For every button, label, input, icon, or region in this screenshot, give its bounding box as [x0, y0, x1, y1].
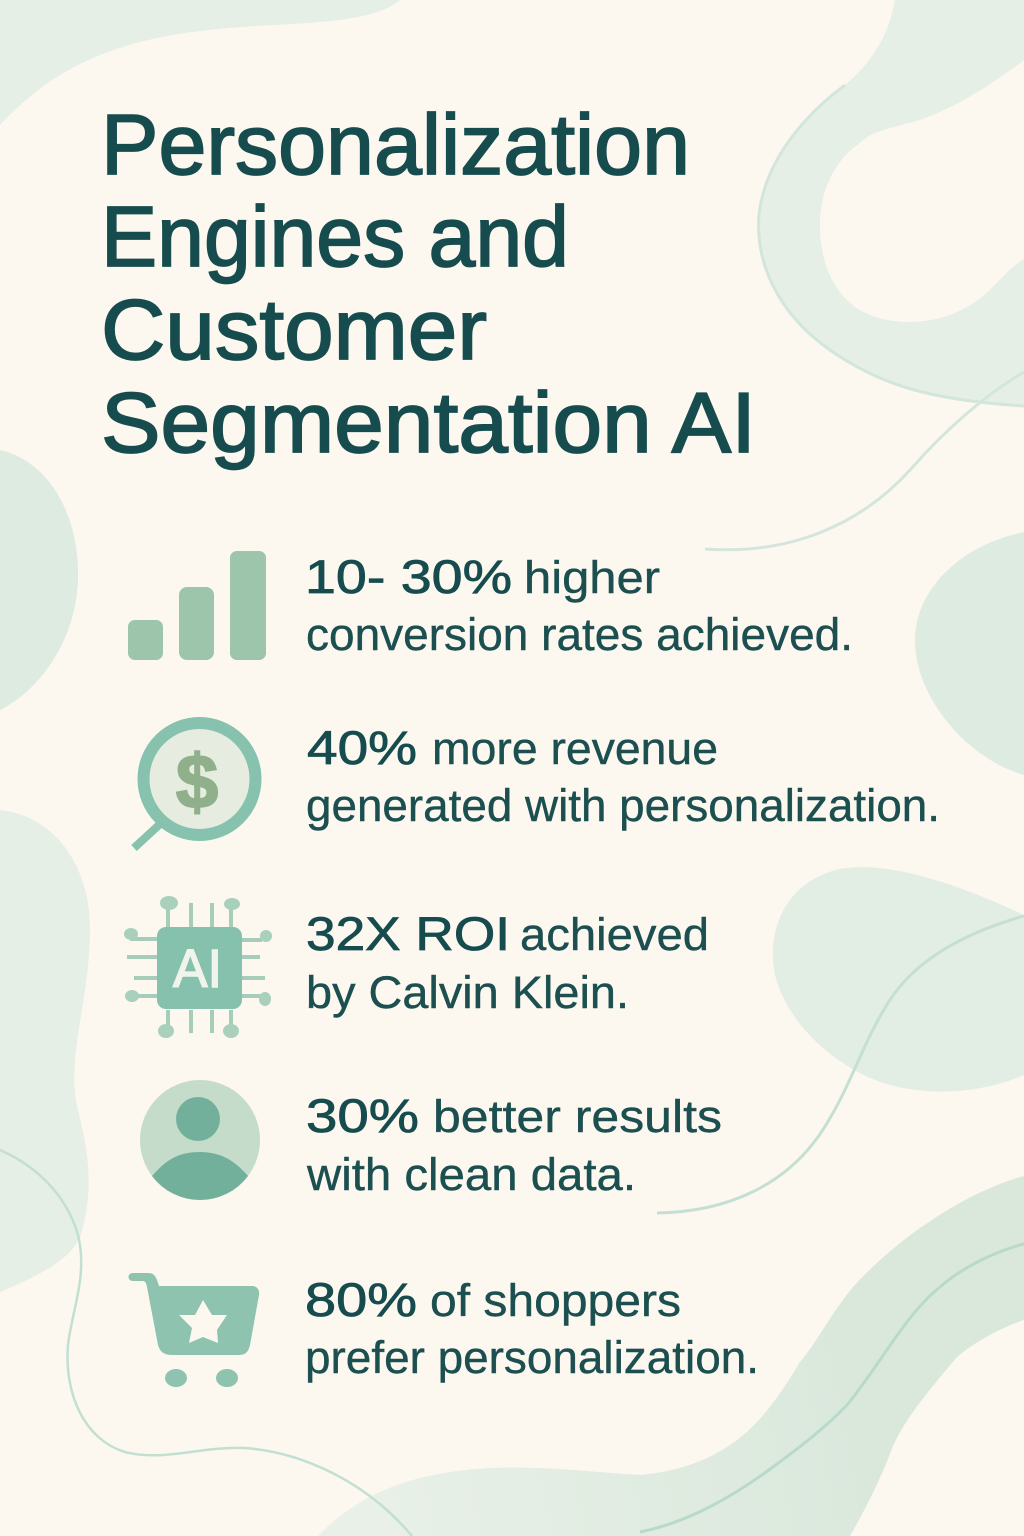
title: Personalization: [101, 98, 690, 193]
text: clean data stat: better results: [433, 1091, 722, 1142]
icon: AI chip: AI: [173, 939, 222, 999]
text: revenue stat: 40%: [307, 721, 417, 774]
text: ROI stat: achieved: [520, 909, 709, 960]
stat row: conversion rates: [128, 550, 853, 660]
icon: magnifier with dollar: $: [176, 740, 218, 825]
text: shoppers stat: of shoppers: [430, 1275, 681, 1326]
text: conversion stat: [305, 550, 853, 660]
text: shoppers stat: [305, 1273, 759, 1383]
text: shoppers stat: 80%: [305, 1273, 417, 1326]
icon: magnifier with dollar: [134, 723, 256, 848]
text: clean data stat: 30%: [306, 1089, 419, 1142]
text: ROI stat: 32X ROI: [306, 907, 510, 960]
text: conversion stat: higher: [524, 552, 660, 603]
title: [101, 98, 756, 471]
title: Customer: [101, 283, 487, 378]
icon: user avatar: [140, 1080, 260, 1200]
title: Engines and: [101, 190, 569, 285]
text: ROI stat: by Calvin Klein.: [306, 967, 629, 1018]
icon: shopping cart with star: [128, 1273, 259, 1387]
text: conversion stat: conversion rates achieved.: [306, 609, 853, 660]
icon: AI chip: [124, 896, 272, 1038]
text: ROI stat: [306, 907, 709, 1018]
stat row: revenue: [134, 721, 940, 848]
text: revenue stat: [306, 721, 940, 831]
stat row: clean data: [140, 1080, 722, 1200]
text: clean data stat: [306, 1089, 722, 1200]
stat row: shoppers: [128, 1273, 759, 1387]
text: revenue stat: generated with personalization.: [306, 780, 940, 831]
title: Segmentation AI: [101, 376, 756, 471]
text: shoppers stat: prefer personalization.: [305, 1332, 759, 1383]
text: clean data stat: with clean data.: [306, 1149, 636, 1200]
stat row: ROI: [124, 896, 709, 1038]
text: conversion stat: 10- 30%: [305, 550, 512, 603]
text: revenue stat: more revenue: [432, 723, 718, 774]
icon: bar chart: [128, 551, 266, 660]
